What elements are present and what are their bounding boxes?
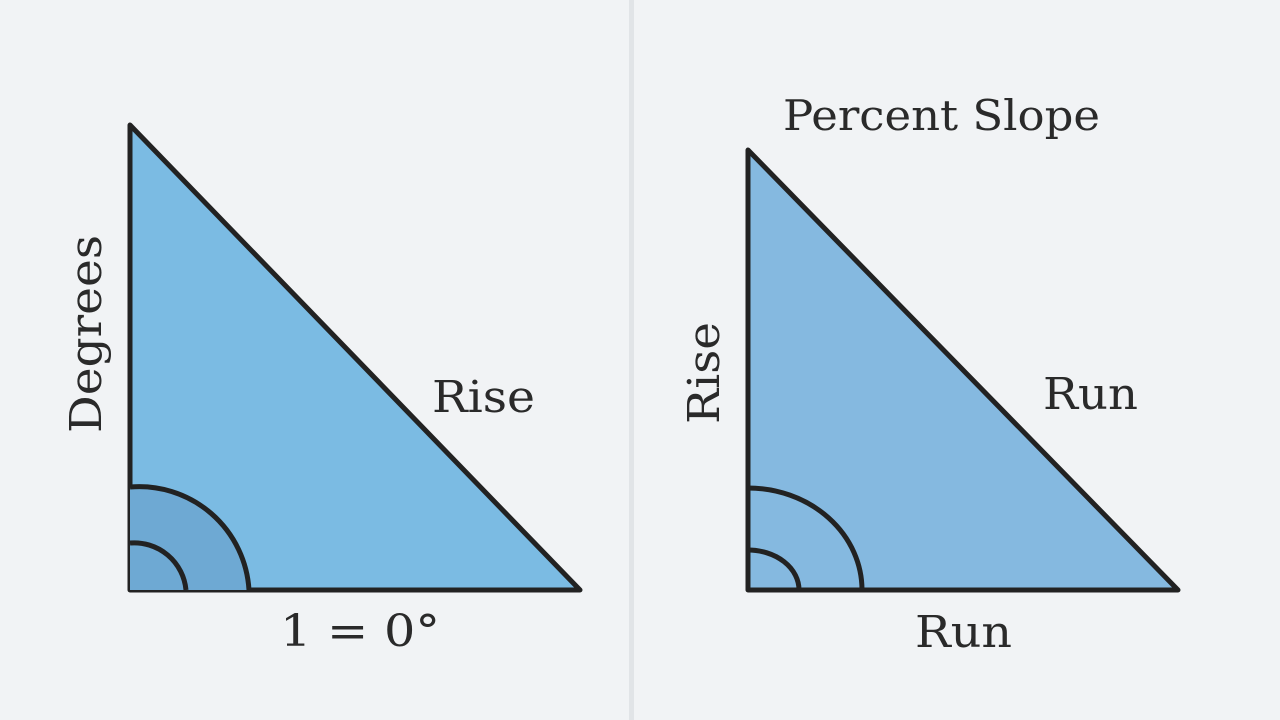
label: Degrees: Degrees: [61, 235, 112, 433]
title: Percent Slope: Percent Slope: [783, 91, 1100, 140]
label: Rise vertical: Rise: [679, 322, 730, 424]
angle arcs: right: [748, 488, 862, 590]
label: Run hypotenuse: Run: [1043, 369, 1138, 420]
triangle: left: [130, 125, 580, 590]
panel: degrees triangle: [61, 125, 580, 657]
label: Run bottom: Run: [915, 607, 1012, 658]
triangle: right: [748, 150, 1178, 590]
label: 1 = 0°: 1 = 0°: [280, 606, 440, 657]
label: Rise: Rise: [432, 372, 535, 423]
angle arcs: left: [130, 487, 249, 590]
panel: percent slope triangle: [679, 91, 1178, 658]
